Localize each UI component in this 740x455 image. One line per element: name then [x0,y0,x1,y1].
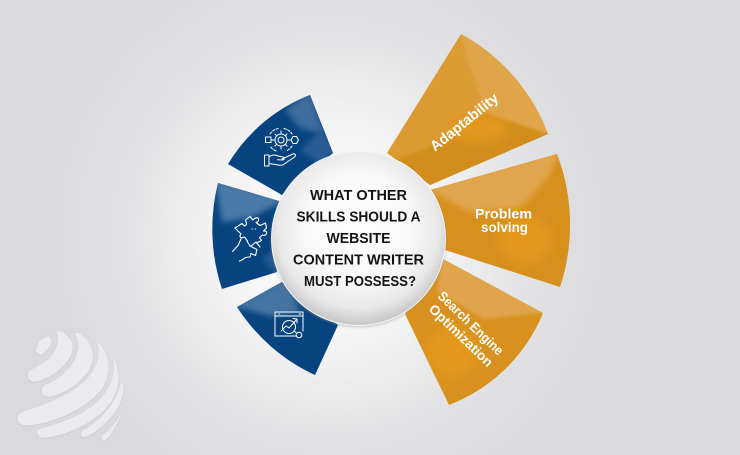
title: WHAT OTHER [310,188,407,204]
panel: Adaptability segment [387,34,548,185]
label: Problem solving: Problem [475,206,532,222]
title: SKILLS SHOULD A [296,210,421,226]
panel: blue segment middle [212,183,279,289]
label: Search Engine Optimization: Search Engine [435,288,507,359]
icon: gear and hand [264,128,298,166]
title: MUST POSSESS? [304,274,416,290]
panel: blue segment bottom [232,278,338,375]
panel: Problem solving segment [425,150,570,287]
panel: Search Engine Optimization segment [405,255,550,405]
icon: puzzle in hand [232,216,267,261]
label: Search Engine Optimization: Optimization [426,301,496,370]
icon: analytics window [275,312,303,338]
label: Problem solving: solving [481,219,528,235]
title [293,188,424,290]
center circle [272,152,446,327]
title: WEBSITE [326,231,391,247]
icon: globe watermark [17,331,123,440]
label: Adaptability: Adaptability [427,90,502,155]
title: CONTENT WRITER [293,252,424,268]
panel: blue segment top [228,90,335,195]
label: Problem solving [475,206,532,235]
